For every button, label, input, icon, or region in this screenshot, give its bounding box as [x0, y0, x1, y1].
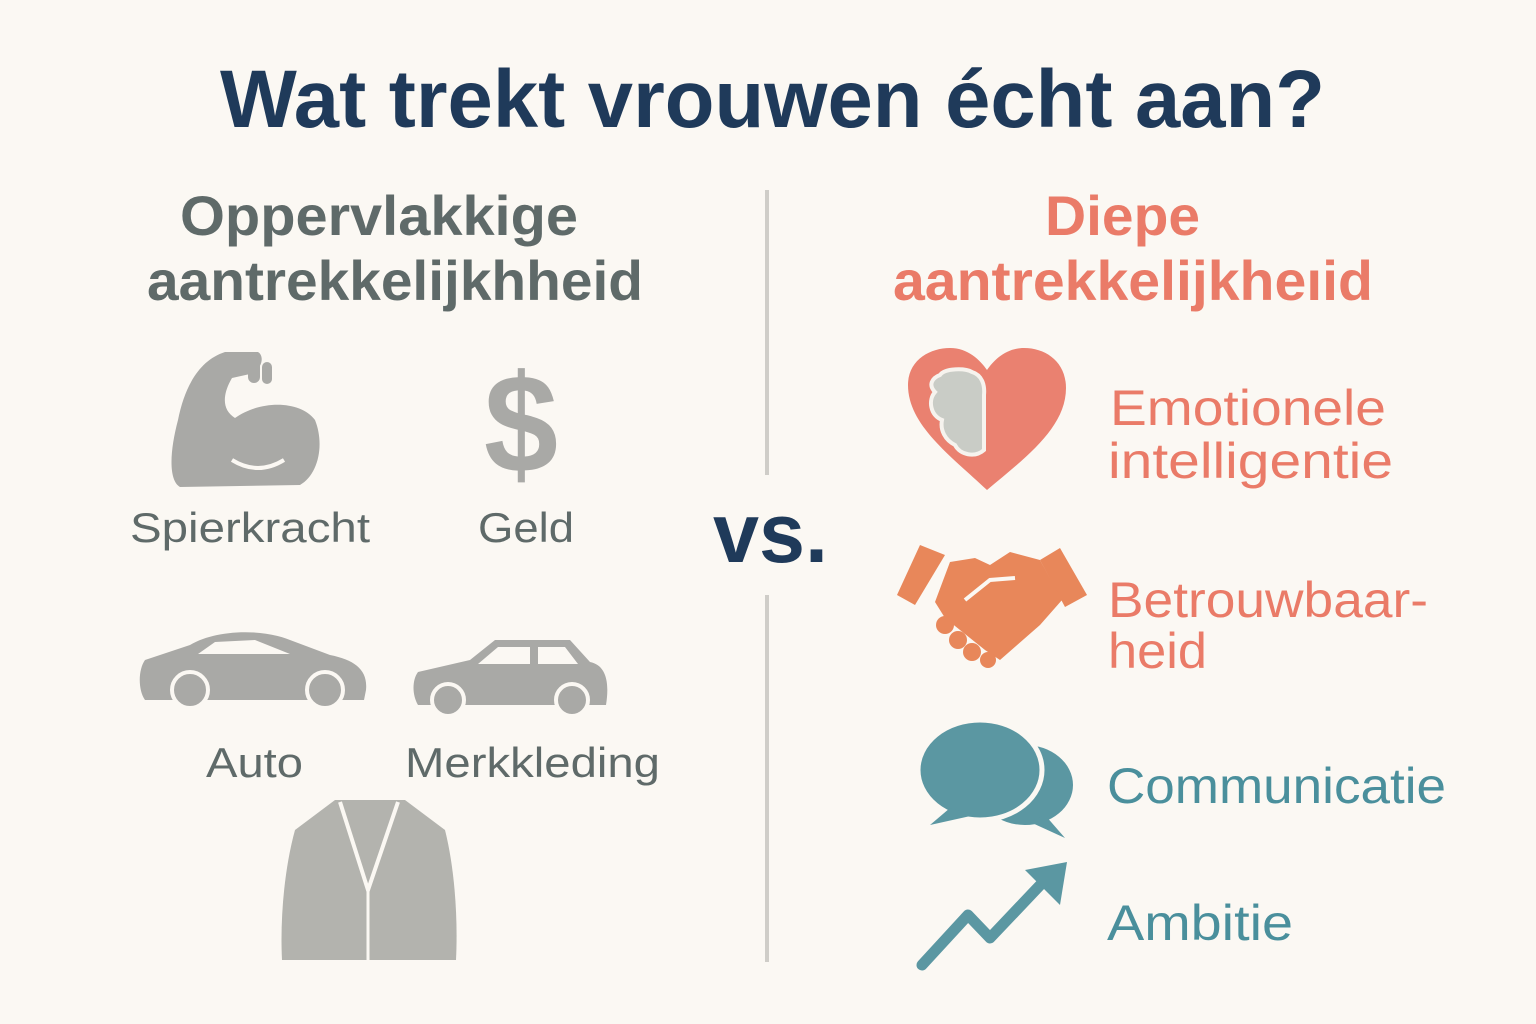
- icon: car 2: [414, 640, 607, 716]
- label: betrouwbaarheid: heid: [1108, 623, 1207, 679]
- title: Wat trekt vrouwen écht aan?: [220, 54, 1325, 145]
- icon: speech bubbles: [918, 720, 1073, 838]
- heading: oppervlakkige: aantrekkelijkhheid: [147, 249, 643, 312]
- label: emotionele intelligentie: intelligentie: [1108, 433, 1393, 489]
- label: geld: Geld: [478, 504, 574, 551]
- icon: rising arrow: [922, 862, 1067, 965]
- label: emotionele intelligentie: Emotionele: [1110, 380, 1386, 436]
- icon: jacket: [282, 800, 457, 960]
- label: auto: Auto: [206, 739, 303, 786]
- label: communicatie: Communicatie: [1107, 758, 1446, 814]
- icon: heart with brain: [908, 348, 1066, 490]
- icon: bicep: [172, 352, 320, 487]
- vs label: vs.: [713, 486, 828, 580]
- icon: handshake: [897, 545, 1087, 668]
- heading: diepe: Diepe: [1045, 184, 1200, 247]
- heading: diepe: aantrekkelijkheıid: [893, 249, 1373, 312]
- label: betrouwbaarheid: [1108, 572, 1428, 679]
- label: spierkracht: Spierkracht: [130, 504, 370, 551]
- label: ambitie: Ambitie: [1107, 895, 1293, 951]
- heading: oppervlakkige: [147, 184, 643, 312]
- label: emotionele intelligentie: [1108, 380, 1393, 489]
- icon: dollar: $: [484, 345, 558, 502]
- label: merkkleding: Merkkleding: [405, 739, 660, 786]
- heading: oppervlakkige: Oppervlakkige: [180, 184, 578, 247]
- icon: car 1: [140, 632, 366, 708]
- label: betrouwbaarheid: Betrouwbaar-: [1108, 572, 1428, 628]
- heading: diepe: [893, 184, 1373, 312]
